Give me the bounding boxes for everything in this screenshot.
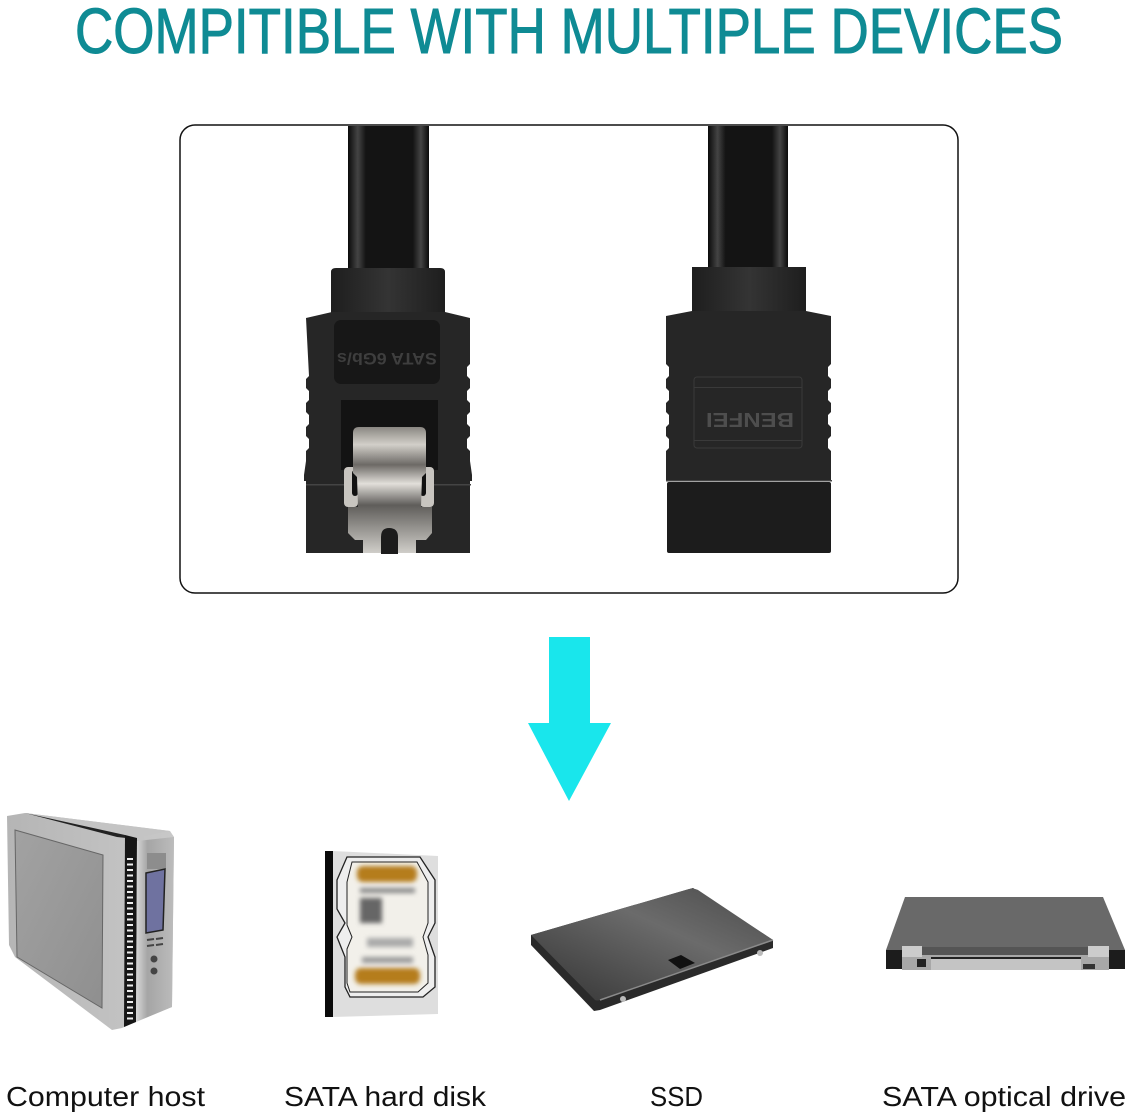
icon: SSD xyxy=(531,888,773,1011)
label: SATA optical drive: SATA optical drive xyxy=(882,1081,1126,1112)
icon: SATA hard disk xyxy=(325,851,438,1017)
icon: computer host xyxy=(7,813,174,1030)
label: Computer host: Computer host xyxy=(6,1081,205,1112)
panel: connector photo frame xyxy=(180,125,958,593)
icon: SATA optical drive xyxy=(886,897,1125,970)
metal latch xyxy=(344,427,434,554)
arrow: cyan down arrow xyxy=(528,637,611,801)
label: SSD: SSD xyxy=(650,1081,703,1112)
right connector xyxy=(666,126,832,553)
left connector with metal latch xyxy=(304,126,472,554)
embossed label: SATA 6Gb/s: SATA 6Gb/s xyxy=(337,349,437,368)
label: SATA hard disk: SATA hard disk xyxy=(284,1081,487,1112)
embossed label: BENFEI: BENFEI xyxy=(706,408,794,430)
